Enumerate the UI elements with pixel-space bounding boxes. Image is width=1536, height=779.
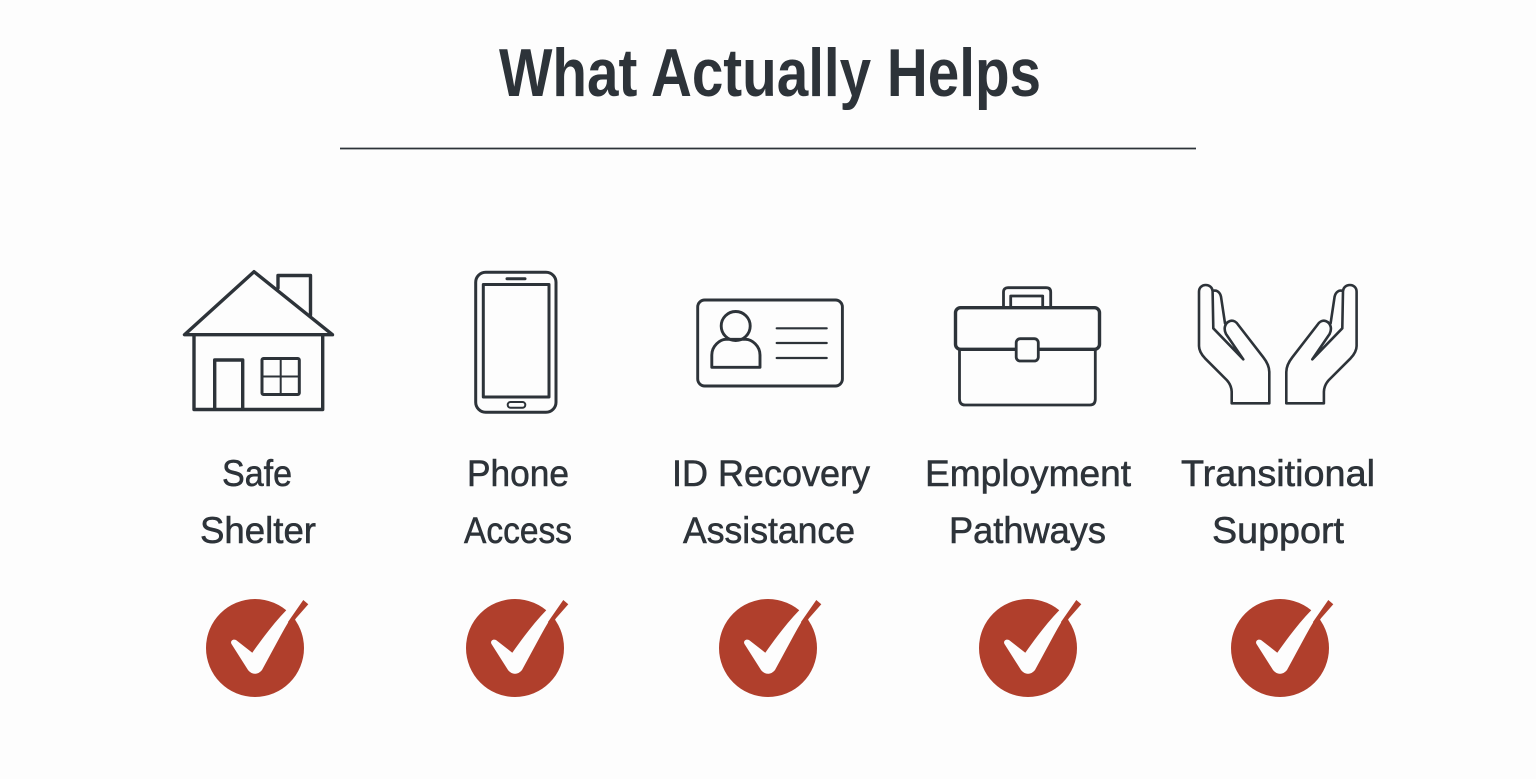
check badge: Phone Access bbox=[466, 599, 568, 697]
label: Safe Shelter: Shelter bbox=[200, 510, 316, 551]
label: Safe Shelter bbox=[200, 453, 316, 551]
label: ID Recovery Assistance: Assistance bbox=[683, 510, 855, 551]
icon: briefcase bbox=[956, 288, 1100, 405]
label: ID Recovery Assistance bbox=[672, 453, 870, 551]
right hand bbox=[1286, 285, 1357, 403]
icon: open hands bbox=[1199, 285, 1357, 403]
label: Transitional Support: Transitional bbox=[1181, 453, 1375, 494]
check badge: Employment Pathways bbox=[979, 599, 1081, 697]
label: Phone Access: Phone bbox=[467, 453, 569, 494]
label: Employment Pathways bbox=[925, 453, 1132, 551]
check badge: Safe Shelter bbox=[206, 599, 308, 697]
label: ID Recovery Assistance: ID Recovery bbox=[672, 453, 870, 494]
left hand bbox=[1199, 285, 1269, 403]
label: Transitional Support: Support bbox=[1212, 510, 1345, 551]
icon: phone bbox=[476, 272, 556, 412]
icon: ID card bbox=[698, 300, 842, 386]
label: Phone Access: Access bbox=[464, 510, 572, 551]
check badge: Transitional Support bbox=[1231, 599, 1333, 697]
label: Safe Shelter: Safe bbox=[222, 453, 292, 494]
check badge: ID Recovery Assistance bbox=[719, 599, 821, 697]
label: Employment Pathways: Employment bbox=[925, 453, 1132, 494]
label: Transitional Support bbox=[1181, 453, 1375, 551]
icon: house bbox=[184, 272, 332, 410]
title: What Actually Helps bbox=[499, 35, 1041, 111]
label: Phone Access bbox=[464, 453, 572, 551]
label: Employment Pathways: Pathways bbox=[949, 510, 1106, 551]
